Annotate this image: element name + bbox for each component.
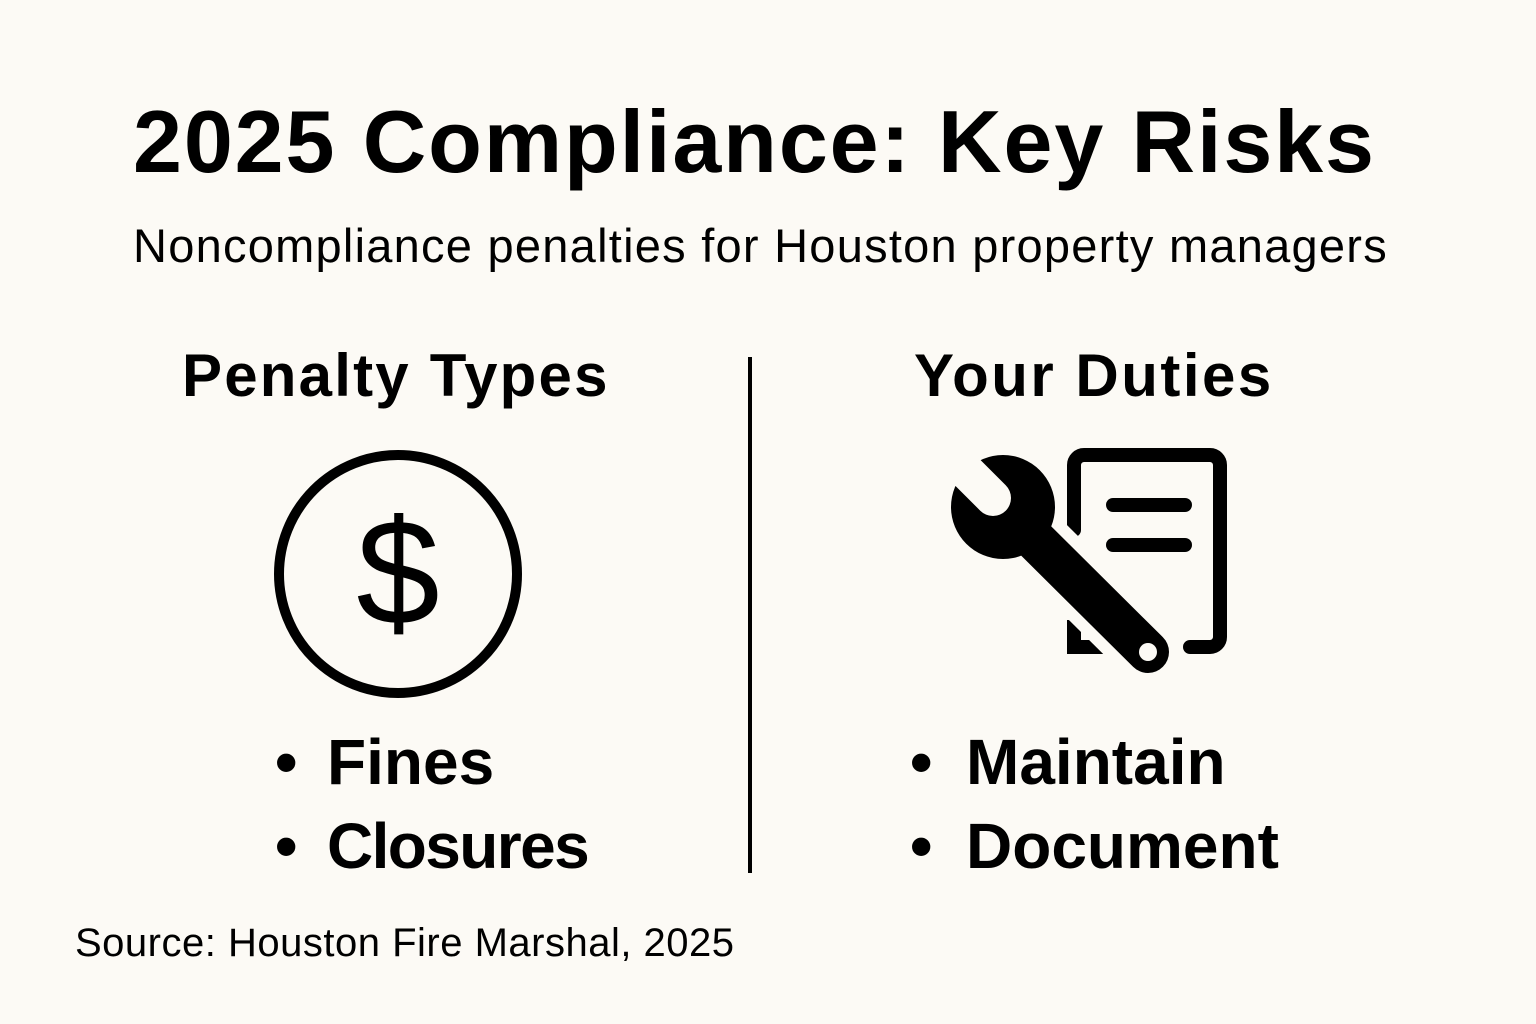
list: penalties: Fines — [327, 726, 494, 798]
subtitle: Noncompliance penalties for Houston property managers — [133, 219, 1388, 272]
list: duties: Document — [966, 810, 1279, 882]
list: penalties — [275, 726, 588, 882]
list: duties — [910, 726, 1279, 882]
list: penalties: • — [275, 726, 297, 798]
title: 2025 Compliance: Key Risks — [133, 92, 1376, 191]
divider line — [748, 357, 752, 873]
source note: Source: Houston Fire Marshal, 2025 — [75, 921, 735, 965]
icon: dollar coin: $ — [356, 488, 440, 656]
heading: Your Duties: Your Duties — [914, 342, 1274, 409]
list: penalties: Closures — [327, 810, 588, 882]
list: duties: • — [910, 726, 932, 798]
list: penalties: • — [275, 810, 297, 882]
icon: dollar coin — [274, 450, 522, 698]
list: duties: • — [910, 810, 932, 882]
heading: Penalty Types: Penalty Types — [182, 342, 610, 409]
list: duties: Maintain — [966, 726, 1226, 798]
